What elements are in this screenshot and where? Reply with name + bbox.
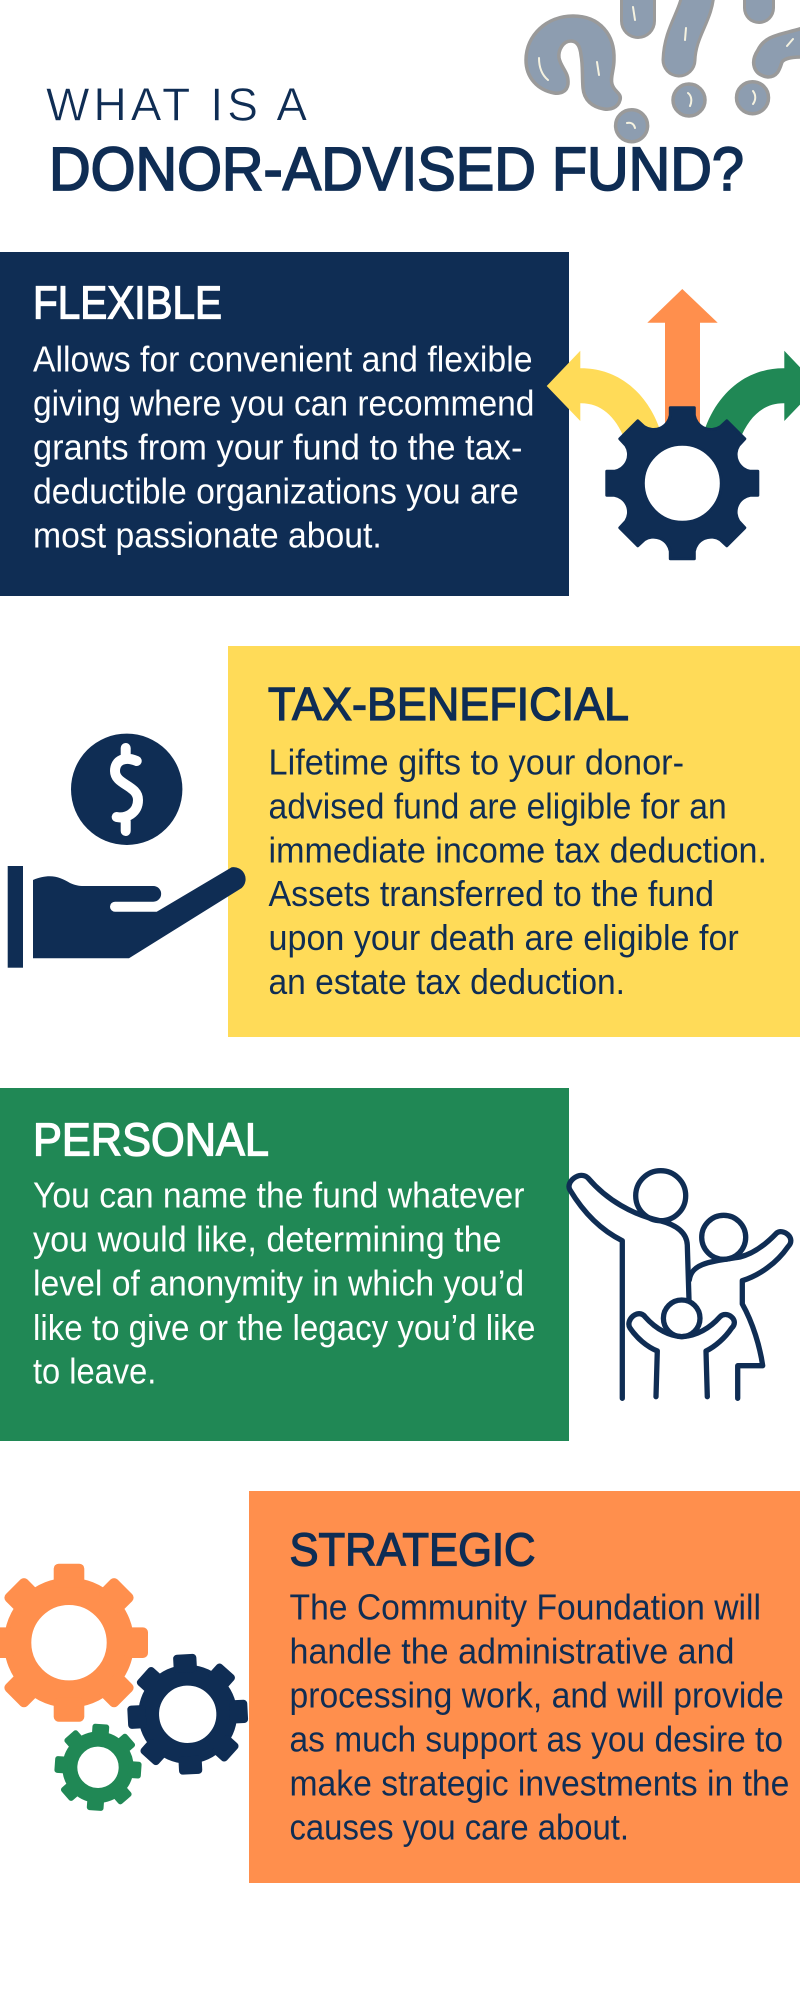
text block: tax-beneficial body [268, 741, 767, 1002]
icon: three gears [0, 1564, 251, 1814]
text block: flexible body: deductible organizations you are [33, 470, 519, 511]
panel: strategic [249, 1491, 800, 1883]
text block: strategic body [290, 1587, 789, 1848]
icon: navy gear [125, 1651, 251, 1777]
panel: flexible [0, 252, 569, 596]
text block: personal body: level of anonymity in which you’d [33, 1263, 524, 1304]
text block: flexible body: Allows for convenient and flexible [33, 339, 532, 380]
icon: question marks [526, 0, 800, 142]
text block: flexible body: grants from your fund to the tax- [33, 426, 522, 467]
heading: personal: PERSONAL [33, 1114, 269, 1166]
text block: tax-beneficial body: advised fund are eligible for an [268, 785, 727, 826]
text block: personal body [33, 1175, 535, 1392]
text block: tax-beneficial body: immediate income tax deduction. [268, 829, 767, 870]
icon: hand [8, 866, 246, 968]
text block: personal body: you would like, determining the [33, 1219, 502, 1260]
icon: green gear [52, 1721, 144, 1814]
panel: personal [0, 1088, 569, 1441]
heading: tax-beneficial: TAX-BENEFICIAL [268, 678, 629, 730]
text block: strategic body: causes you care about. [290, 1807, 629, 1848]
icon: gear [607, 408, 758, 559]
text block: flexible body: most passionate about. [33, 514, 382, 555]
icon: coin [71, 734, 182, 845]
heading: strategic: STRATEGIC [290, 1523, 536, 1575]
arrow: orange up [647, 289, 718, 440]
icon: family of three [569, 1171, 791, 1398]
icon: hand holding dollar coin [8, 734, 246, 968]
text block: personal body: You can name the fund whatever [33, 1175, 525, 1216]
panel: tax-beneficial [228, 646, 800, 1037]
title line: what is a: WHAT IS A [46, 79, 307, 131]
text block: strategic body: The Community Foundation will [290, 1587, 761, 1628]
text block: flexible body: giving where you can recommend [33, 383, 534, 424]
arrow: yellow left [547, 351, 662, 440]
text block: personal body: like to give or the legacy you’d like [33, 1307, 535, 1348]
title [46, 79, 744, 203]
text block: flexible body [33, 339, 534, 555]
arrow: green right [703, 351, 800, 440]
icon: orange gear [0, 1564, 148, 1722]
text block: tax-beneficial body: an estate tax deduction. [268, 961, 625, 1002]
text block: tax-beneficial body: upon your death are eligible for [268, 917, 739, 958]
text block: personal body: to leave. [33, 1351, 156, 1392]
text block: tax-beneficial body: Lifetime gifts to your donor- [268, 741, 684, 782]
text block: tax-beneficial body: Assets transferred to the fund [268, 873, 714, 914]
icon: gear with three arrows [547, 289, 800, 559]
text block: strategic body: handle the administrative and [290, 1631, 734, 1672]
heading: flexible: FLEXIBLE [33, 276, 222, 328]
title line: donor-advised fund: DONOR-ADVISED FUND? [49, 135, 744, 203]
